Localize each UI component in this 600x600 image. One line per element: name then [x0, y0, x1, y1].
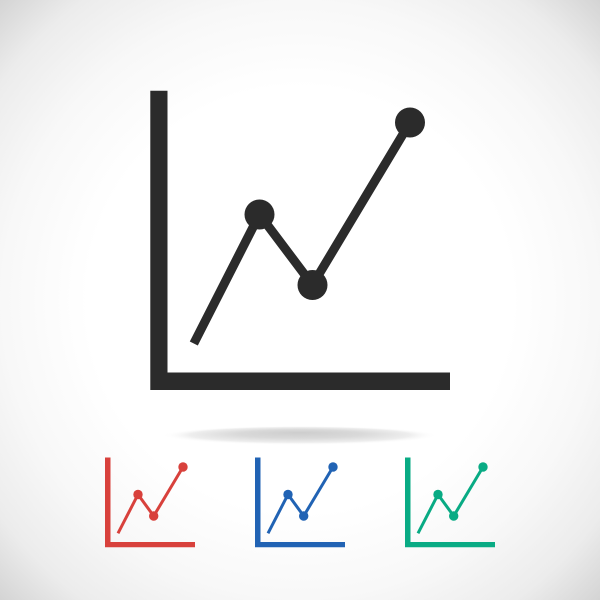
ground shadow ellipse	[162, 426, 438, 445]
data points	[244, 108, 425, 300]
small green icon	[405, 458, 495, 547]
axes	[105, 458, 195, 547]
trend line	[268, 467, 333, 533]
trend line	[118, 467, 183, 533]
small blue icon	[255, 458, 345, 547]
axes	[150, 91, 450, 390]
trend line	[194, 122, 410, 344]
small red icon	[105, 458, 195, 547]
trend line	[418, 467, 483, 533]
axes	[255, 458, 345, 547]
data points	[433, 462, 488, 521]
data points	[133, 462, 188, 521]
data points	[283, 462, 338, 521]
main line chart icon	[150, 91, 450, 390]
axes	[405, 458, 495, 547]
